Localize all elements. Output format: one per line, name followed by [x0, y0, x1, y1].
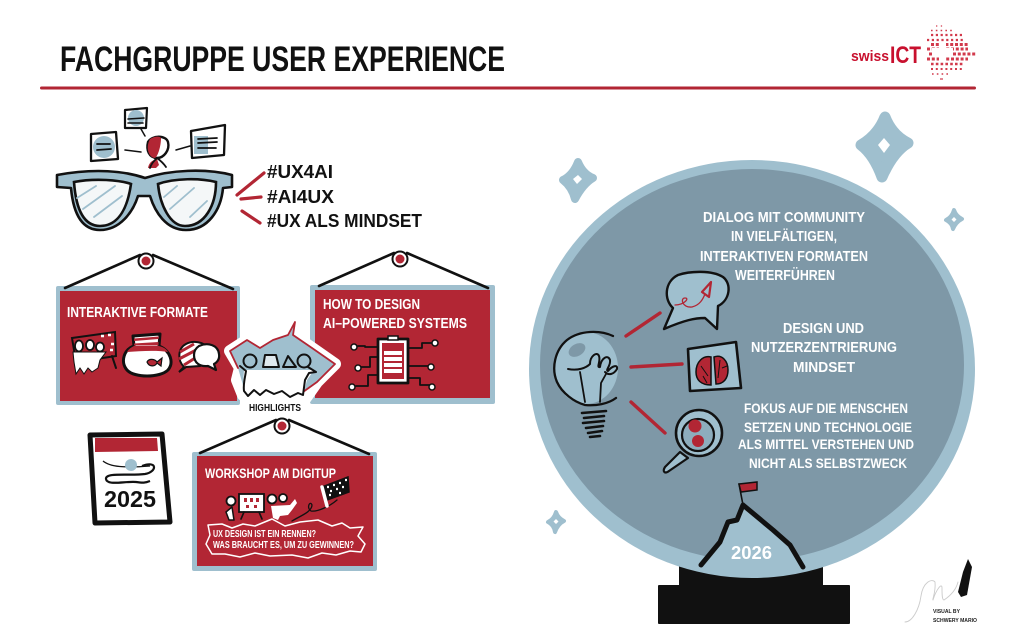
icon: mountain with flag: [701, 482, 803, 575]
hashtags: [267, 162, 422, 231]
icon: glasses: [57, 171, 232, 230]
sparkle stars: [548, 117, 962, 532]
text: design mindset: [751, 321, 897, 376]
icon: people at board: [226, 494, 337, 521]
text: design mindset: DESIGN UND: [783, 321, 864, 337]
sparkle big: [861, 117, 908, 177]
icon: document left: [91, 132, 118, 161]
callout banner: [206, 519, 365, 558]
icon: speech bubble: [664, 272, 729, 329]
logo: swissICT: [851, 26, 977, 79]
text: fokus: SETZEN UND TECHNOLOGIE: [744, 419, 912, 435]
panel heading: HOW TO DESIGN: [323, 297, 420, 313]
sparkle lower left: [548, 512, 564, 532]
text: fokus: NICHT ALS SELBSTZWECK: [749, 455, 907, 471]
icon: calendar 2025: [90, 434, 170, 523]
connector strokes to hashtags: [237, 173, 264, 223]
icon: light bulb: [554, 332, 618, 437]
text: dialog: DIALOG MIT COMMUNITY: [703, 210, 865, 226]
text: dialog: INTERAKTIVEN FORMATEN: [700, 249, 868, 265]
panel heading: INTERAKTIVE FORMATE: [67, 304, 208, 321]
icon: checkered flag: [322, 477, 349, 506]
icon: chip: [349, 336, 438, 390]
crystal ball: [529, 160, 975, 578]
hashtags: #UX ALS MINDSET: [267, 211, 422, 231]
icon: speech bubbles: [179, 342, 219, 372]
text: design mindset: MINDSET: [793, 360, 855, 376]
logo: swissICT: ICT: [890, 42, 921, 69]
icon: document right: [191, 125, 225, 158]
text: dialog: [700, 210, 868, 284]
icon: board with people: [72, 332, 116, 374]
logo: swissICT: swiss: [851, 48, 889, 65]
signature: visual by: [905, 559, 978, 624]
panel: interaktive Formate: [56, 254, 240, 405]
text: fokus: ALS MITTEL VERSTEHEN UND: [738, 436, 914, 452]
panel: how to design AI-powered systems: [310, 252, 495, 404]
panel heading: AI–POWERED SYSTEMS: [323, 316, 467, 332]
signature: visual by: SCHWERY MARIO: [933, 618, 978, 624]
text: design mindset: NUTZERZENTRIERUNG: [751, 340, 897, 356]
icon: mountain with flag: 2026: [731, 543, 772, 563]
icon: highlights burst: [230, 322, 335, 399]
callout banner: WAS BRAUCHT ES, UM ZU GEWINNEN?: [213, 540, 354, 551]
text: fokus: [738, 400, 914, 471]
label: highlights: HIGHLIGHTS: [249, 402, 301, 414]
sparkle left: [563, 162, 593, 199]
text: dialog: WEITERFÜHREN: [735, 267, 835, 284]
callout banner: UX DESIGN IST EIN RENNEN?: [213, 529, 316, 540]
icon: calendar 2025: 2025: [104, 486, 156, 512]
sparkle right: [946, 210, 962, 229]
icon: document top: [125, 108, 147, 128]
panel heading: [323, 297, 467, 332]
glasses with person and documents: [57, 108, 232, 230]
connector strokes from bulb: [626, 313, 682, 433]
icon: fish bowl: [123, 334, 171, 376]
icon: brain in frame: [688, 342, 741, 391]
hashtags: #UX4AI: [267, 162, 333, 182]
hashtags: #AI4UX: [267, 187, 334, 207]
icon: magnifier: [664, 410, 722, 472]
text: fokus: FOKUS AUF DIE MENSCHEN: [744, 400, 908, 416]
icon: person: [147, 137, 168, 168]
text: dialog: IN VIELFÄLTIGEN,: [731, 228, 837, 245]
title: FACHGRUPPE USER EXPERIENCE: [60, 40, 505, 79]
panel: workshop am DigitUp: [192, 418, 377, 571]
pedestal base: [658, 555, 850, 624]
panel heading: WORKSHOP AM DIGITUP: [205, 465, 336, 481]
signature: visual by: VISUAL BY: [933, 609, 960, 615]
